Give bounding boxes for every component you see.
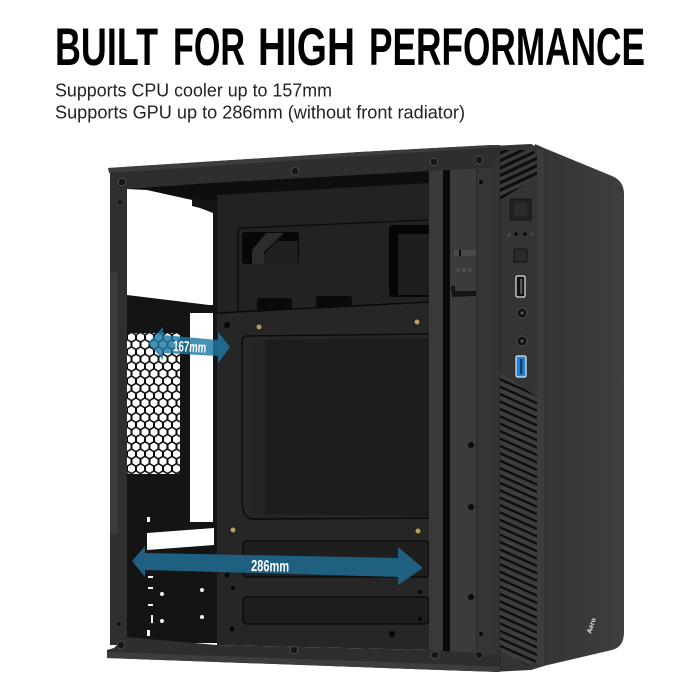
rear window opening — [127, 189, 213, 305]
text block: specifications — [55, 80, 465, 122]
title: HIGH — [258, 18, 355, 77]
LED indicators — [507, 232, 534, 237]
upper cut-out right — [389, 225, 430, 297]
side panel — [535, 144, 624, 668]
expansion slot details — [147, 517, 204, 636]
title: FOR — [173, 18, 245, 77]
exhaust mesh — [127, 333, 180, 474]
title: BUILT — [55, 18, 158, 77]
lower vents — [500, 373, 537, 666]
arrow: 286mm dimension: 286mm — [251, 558, 289, 576]
reset button — [514, 249, 527, 262]
cable tabs — [257, 296, 352, 311]
motherboard tray lower section — [217, 302, 430, 650]
front pillars — [429, 158, 492, 656]
bottom frame bar — [107, 637, 500, 672]
title — [55, 18, 645, 77]
motherboard tray upper section — [217, 183, 430, 314]
text block: specifications: Supports GPU up to 286mm (without front radiator) — [55, 102, 465, 122]
arrow: 167mm dimension — [148, 327, 230, 363]
frame screws — [117, 641, 483, 659]
front panel — [492, 144, 598, 672]
left frame post — [110, 170, 127, 645]
interior ceiling — [127, 165, 430, 200]
upper cut-out left — [242, 232, 299, 264]
top frame bar — [108, 145, 500, 192]
microphone jack — [517, 336, 527, 346]
audio jack — [517, 308, 527, 318]
arrow: 286mm dimension — [132, 546, 423, 585]
USB 3.0 port — [516, 356, 526, 377]
lower recess bottom — [243, 597, 429, 624]
computer case — [107, 144, 624, 672]
expansion slot opening — [147, 528, 214, 550]
frame screws — [118, 156, 483, 186]
text block: specifications: Supports CPU cooler up to 157mm — [55, 80, 332, 100]
USB 2.0 port — [516, 276, 525, 297]
power button — [510, 199, 531, 220]
mounting standoffs — [230, 319, 421, 534]
bay clip — [451, 250, 476, 297]
lower recess top — [243, 541, 429, 577]
top vents — [500, 150, 537, 200]
rear window lower opening — [190, 313, 213, 522]
rear interior — [127, 185, 218, 643]
arrow: 167mm dimension: 167mm — [173, 338, 207, 357]
brand logo: Aero — [586, 617, 598, 635]
